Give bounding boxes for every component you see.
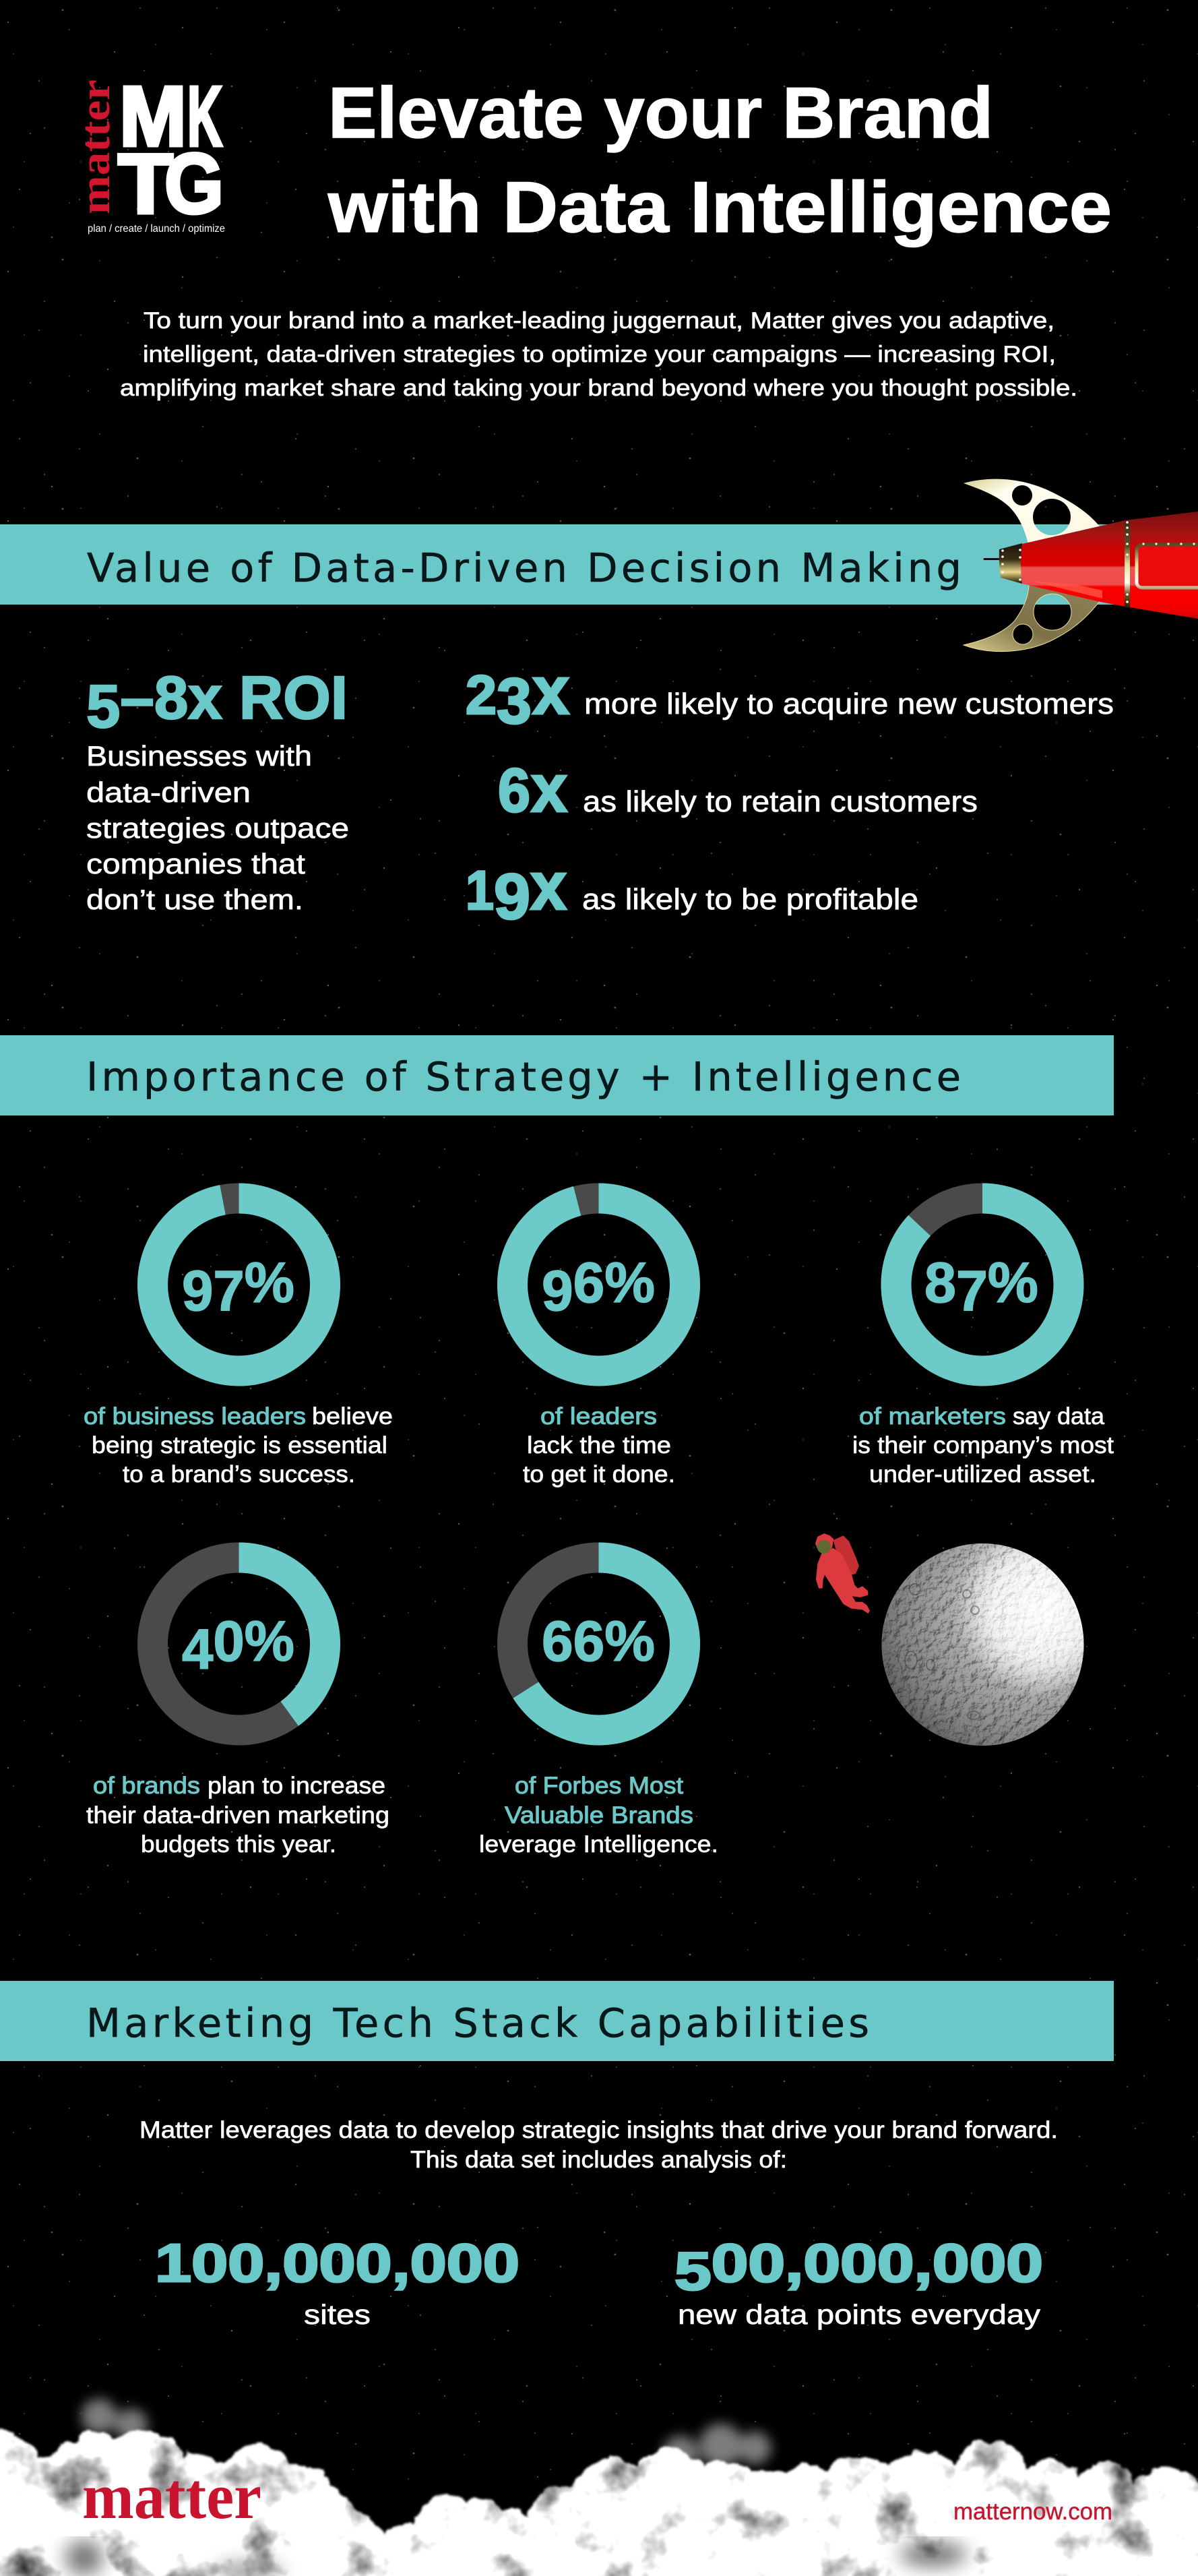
stat: 23x: 2	[466, 665, 497, 726]
intro text: intelligent, data-driven strategies to optimize your campaigns — increasing ROI,	[143, 342, 1056, 367]
donut: 96%: 6%	[573, 1251, 655, 1314]
stat: 500,000,000 new data points everyday	[674, 2233, 1043, 2330]
donut: 97%: %	[245, 1251, 294, 1314]
heading: Marketing Tech Stack Capabilities	[86, 2000, 869, 2046]
intro text: To turn your brand into a market-leading juggernaut, Matter gives you adaptive,	[144, 308, 1054, 334]
caption: their data-driven marketing	[86, 1802, 389, 1829]
ROI description: companies that	[86, 848, 305, 880]
illustration: moon	[881, 1543, 1083, 1746]
caption: under-utilized asset.	[869, 1461, 1096, 1488]
rocket ring	[1125, 521, 1130, 607]
title: with Data Intelligence	[327, 166, 1112, 247]
caption	[84, 1403, 393, 1488]
donut: 97%: 97	[182, 1259, 245, 1322]
caption: lack the time	[527, 1432, 671, 1459]
stat: 100,000,000 sites: sites	[304, 2299, 371, 2330]
stat: 100,000,000 sites	[155, 2233, 519, 2330]
logo: Matter MKTG	[73, 69, 225, 235]
big stat: 5-8x ROI: 5	[86, 673, 120, 741]
stat: 6x: x	[531, 751, 567, 826]
tech stack intro: Matter leverages data to develop strategic insights that drive your brand forward.	[139, 2117, 1058, 2143]
stat: 19x	[466, 849, 918, 933]
caption	[523, 1403, 675, 1488]
stat: 19x: 1	[466, 860, 494, 921]
ROI description: Businesses with	[86, 740, 312, 772]
ROI description: data-driven	[86, 776, 251, 808]
logo tagline: plan / create / launch / optimize	[88, 223, 225, 235]
stat: 19x: as likely to be profitable	[582, 883, 918, 916]
heading: Importance of Strategy + Intelligence	[86, 1053, 961, 1100]
footer link: matternow.com: matternow.com	[953, 2498, 1112, 2525]
stat: 6x	[498, 751, 978, 826]
astronaut visor	[817, 1540, 831, 1554]
logo letters: MK: K	[187, 69, 222, 164]
stat: 100,000,000 sites: 100,000,000	[155, 2233, 519, 2293]
section band: marketing tech stack capabilities	[0, 1981, 1114, 2061]
caption	[479, 1773, 718, 1858]
donut: 87%	[852, 1198, 1114, 1488]
intro text: amplifying market share and taking your brand beyond where you thought possible.	[120, 375, 1077, 401]
caption: of leaders	[540, 1403, 657, 1430]
title	[327, 72, 1112, 247]
caption: say data	[1013, 1403, 1105, 1430]
tech stack intro: This data set includes analysis of:	[410, 2147, 787, 2173]
caption	[86, 1773, 389, 1858]
tech stack intro	[139, 2117, 1058, 2173]
caption	[852, 1403, 1114, 1488]
donut: 97%	[84, 1198, 393, 1488]
intro text	[120, 308, 1077, 401]
stat: 500,000,000 new data points everyday: 00,000,000	[712, 2233, 1043, 2293]
rocket window	[1137, 545, 1198, 588]
title: Elevate your Brand	[328, 72, 993, 153]
caption: being strategic is essential	[92, 1432, 387, 1459]
rocket nose cone	[999, 543, 1022, 584]
rocket body	[1021, 512, 1198, 619]
stat: 500,000,000 new data points everyday: new data points everyday	[678, 2299, 1041, 2330]
caption: to get it done.	[523, 1461, 675, 1488]
astronaut suit	[816, 1548, 870, 1614]
rocket top fin	[964, 479, 1102, 544]
caption: plan to increase	[208, 1773, 385, 1799]
footer logo: matter: matter	[82, 2460, 261, 2532]
donut: 96%	[512, 1198, 685, 1488]
rocket antenna	[984, 558, 1000, 560]
caption: Valuable Brands	[505, 1802, 693, 1829]
stat: 500,000,000 new data points everyday: 5	[674, 2241, 712, 2301]
stat: 23x	[466, 653, 1114, 737]
caption: of business leaders	[84, 1403, 306, 1430]
logo letters: TG: T	[118, 136, 173, 231]
caption: believe	[312, 1403, 393, 1430]
donut: 40%: 4	[182, 1618, 214, 1681]
donut: 40%: 0%	[213, 1609, 294, 1673]
stat: 23x: 3	[497, 665, 532, 737]
caption: of brands	[93, 1773, 200, 1799]
illustration: clouds	[0, 2399, 1198, 2576]
donut: 40%	[86, 1558, 389, 1858]
logo wordmark: matter: matter	[73, 80, 119, 214]
caption: of Forbes Most	[515, 1773, 683, 1799]
donut: 87%: 8	[924, 1251, 956, 1314]
stat: 19x: x	[530, 849, 567, 924]
caption: of marketers	[859, 1403, 1006, 1430]
rocket body shading	[1031, 581, 1102, 599]
ROI description	[86, 740, 349, 915]
panel: likelihood stats	[466, 653, 1114, 933]
section band: importance of strategy + intelligence	[0, 1035, 1114, 1115]
illustration: astronaut	[815, 1533, 870, 1614]
panel: ROI headline	[86, 665, 349, 915]
astronaut helmet	[815, 1533, 833, 1554]
donut: 66%	[479, 1558, 718, 1858]
stat: 19x: 9	[494, 861, 530, 933]
caption: budgets this year.	[141, 1831, 336, 1858]
big stat: 5-8x ROI: –8x ROI	[120, 665, 348, 732]
ROI description: don’t use them.	[86, 884, 303, 915]
stat: 23x: more likely to acquire new customers	[584, 687, 1114, 720]
donut: 87%: %	[988, 1251, 1038, 1314]
caption: to a brand’s success.	[123, 1461, 355, 1488]
ROI description: strategies outpace	[86, 812, 349, 844]
caption: leverage Intelligence.	[479, 1831, 718, 1858]
rocket rivets	[1001, 521, 1195, 603]
donut: 87%: 7	[956, 1259, 988, 1322]
stat: 6x: 6	[498, 756, 530, 825]
astronaut backpack	[833, 1535, 859, 1577]
logo letters: MK: M	[119, 69, 187, 164]
donut: 66%: 66%	[542, 1609, 655, 1673]
stat: 6x: as likely to retain customers	[583, 785, 978, 818]
section band: value of data-driven decision making	[0, 524, 1120, 605]
caption: is their company’s most	[852, 1432, 1114, 1459]
donut: 96%: 9	[542, 1259, 573, 1322]
logo letters: TG: G	[164, 136, 224, 231]
rocket bottom fin	[964, 584, 1102, 652]
heading: Value of Data-Driven Decision Making	[87, 545, 961, 591]
stat: 23x: x	[532, 653, 569, 729]
illustration: rocket	[964, 479, 1198, 652]
